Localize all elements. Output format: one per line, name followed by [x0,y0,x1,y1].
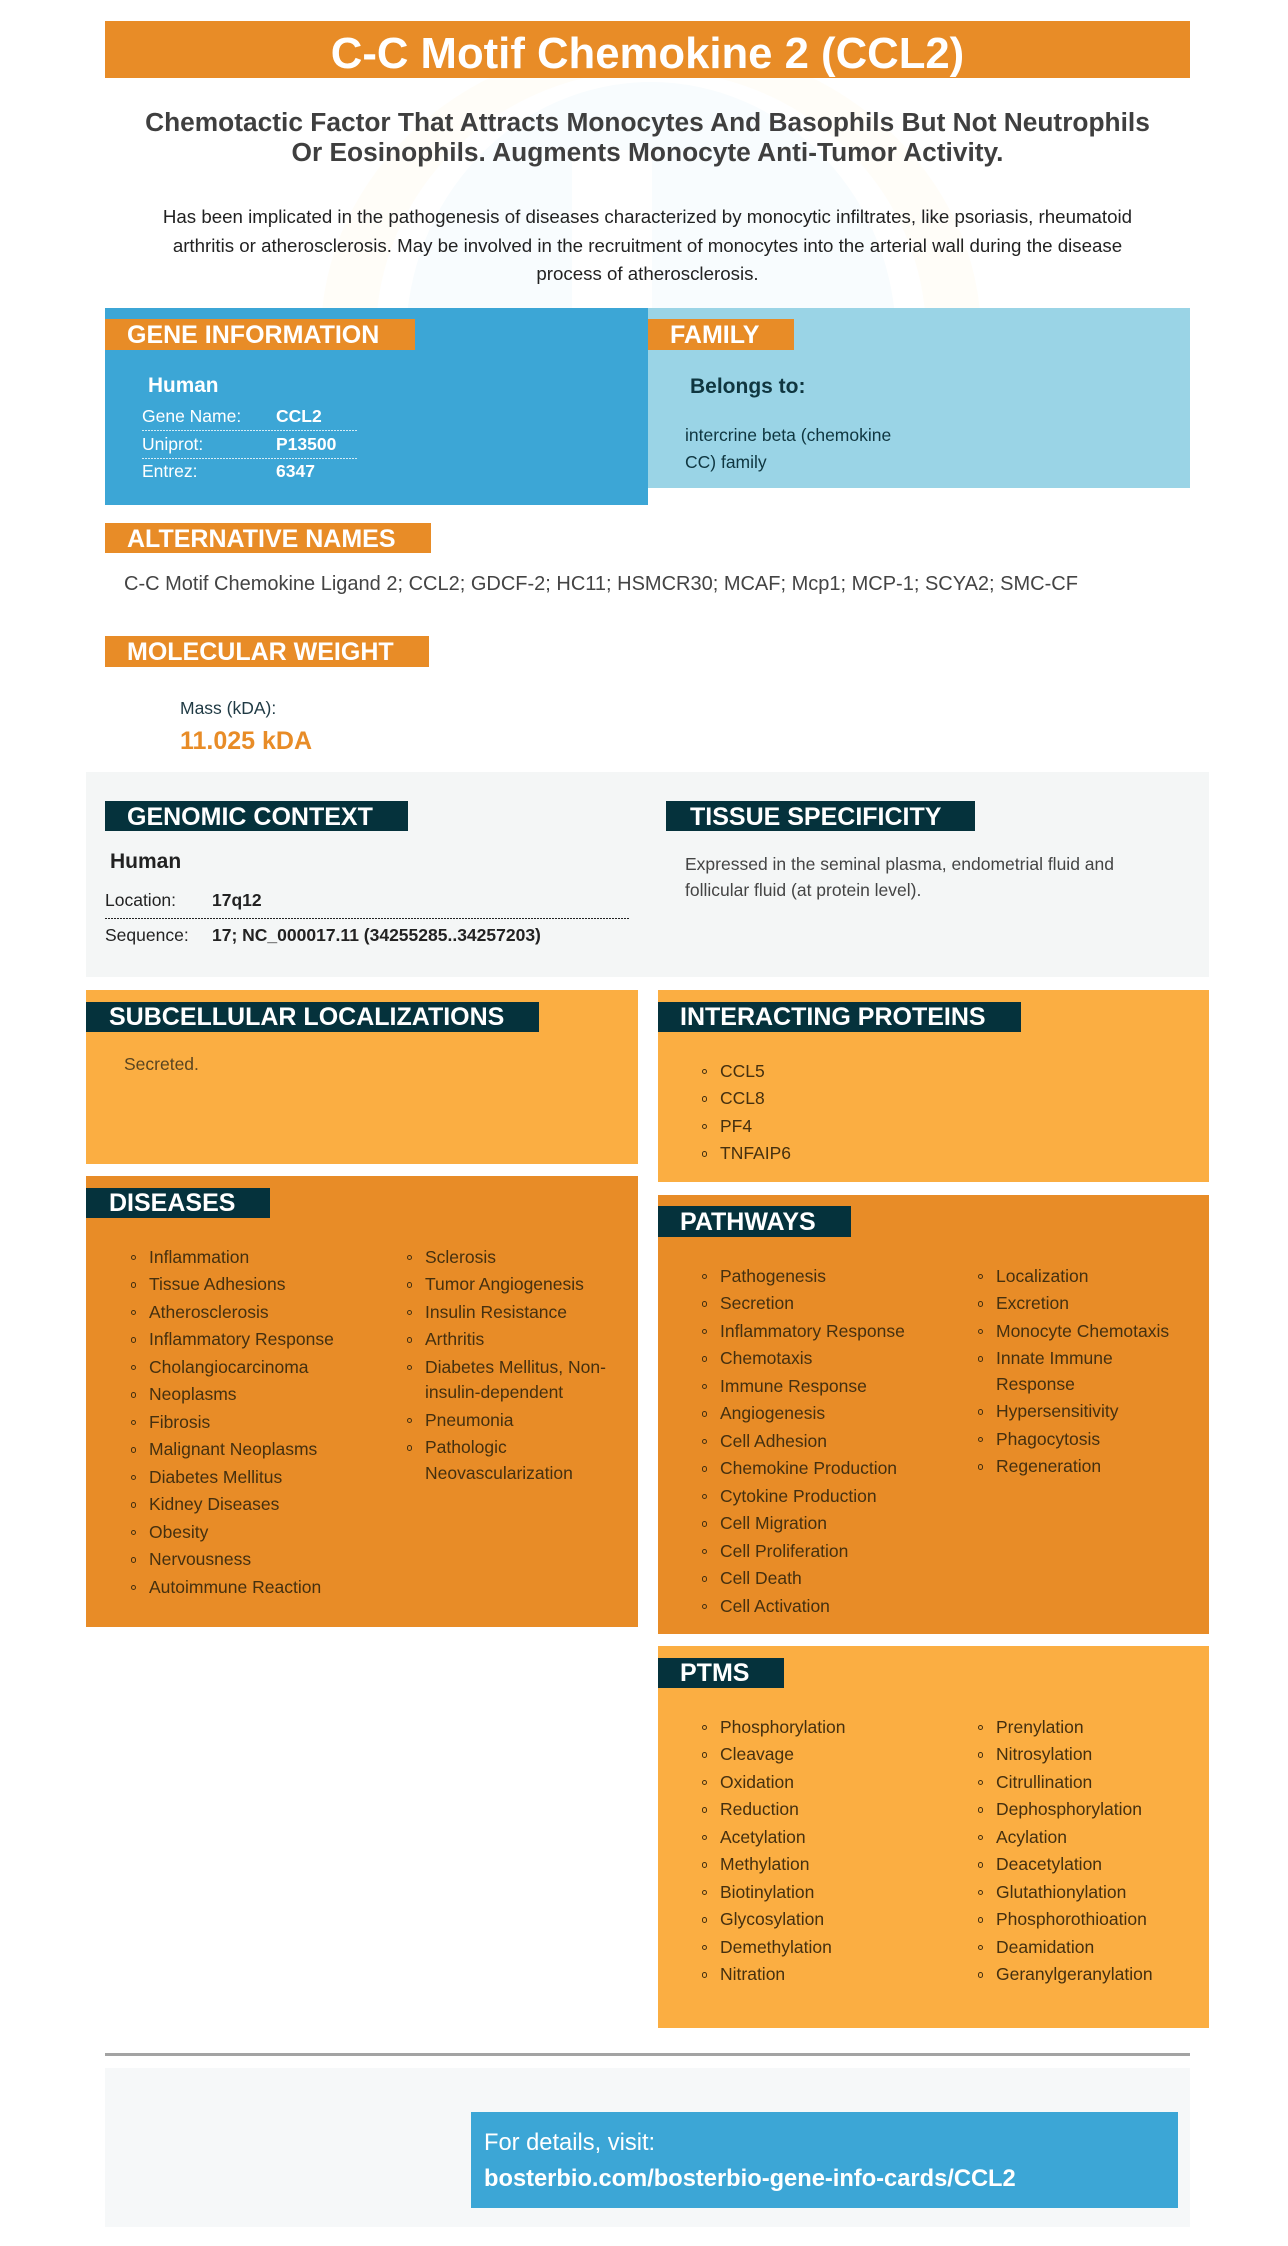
heading: DISEASES [109,1189,235,1217]
list column 2: Deamidation [996,1937,1094,1957]
list: PF4 [720,1116,752,1136]
list: TNFAIP6 [720,1143,791,1163]
tissue text: Expressed in the seminal plasma, endometrial fluid and [685,854,1114,874]
description: process of atherosclerosis. [536,263,759,284]
list column 1: Diabetes Mellitus [149,1467,282,1487]
sequence row: Sequence: [105,925,189,945]
list column 1: Atherosclerosis [149,1302,269,1322]
sequence row: 17; NC_000017.11 (34255285..34257203) [212,925,541,945]
panel: subcellular localizations [86,990,638,1164]
list column 2: Phosphorothioation [996,1909,1147,1929]
mass label: Mass (kDA): [180,698,276,718]
list column 1: Cytokine Production [720,1486,877,1506]
list column 1: Cell Activation [720,1596,830,1616]
species: Human [148,374,218,397]
heading: family: FAMILY [670,321,759,349]
panel: diseases [86,1176,638,1627]
list column 2: Citrullination [996,1772,1092,1792]
list column 1: Reduction [720,1799,799,1819]
list column 1: Neoplasms [149,1384,237,1404]
title: C-C Motif Chemokine 2 (CCL2) [331,29,964,78]
visit label: For details, visit: [484,2130,655,2156]
list column 1: Nervousness [149,1549,251,1569]
list column 1 [131,1247,334,1597]
list column 2: Localization [996,1266,1088,1286]
list column 1: Oxidation [720,1772,794,1792]
heading [658,1206,851,1237]
title [105,21,1190,78]
gene info table: Uniprot: [142,434,203,454]
panel: ptms [658,1646,1209,2028]
list column 1: Secretion [720,1293,794,1313]
subtitle: Chemotactic Factor That Attracts Monocytes And Basophils But Not Neutrophils [145,107,1150,137]
mass value: 11.025 kDA [180,727,312,755]
list column 1: Glycosylation [720,1909,824,1929]
list column 1: Demethylation [720,1937,832,1957]
list column 1: Fibrosis [149,1412,210,1432]
list column 2: Diabetes Mellitus, Non- [425,1357,606,1377]
list column 1: Cell Adhesion [720,1431,827,1451]
description: arthritis or atherosclerosis. May be involved in the recruitment of monocytes into the arterial wall during the disease [173,235,1122,256]
url: bosterbio.com/bosterbio-gene-info-cards/CCL2 [484,2166,1016,2192]
list column 2: Prenylation [996,1717,1084,1737]
panel: pathways [658,1195,1209,1634]
list column 2: Pathologic [425,1437,507,1457]
list column 2: Innate Immune [996,1348,1113,1368]
description: Has been implicated in the pathogenesis of diseases characterized by monocytic infiltrates, like psoriasis, rheumatoid [163,206,1132,227]
list column 2 [978,1266,1169,1476]
list column 2: Neovascularization [425,1463,573,1483]
heading: INTERACTING PROTEINS [680,1003,986,1031]
heading: family [648,319,794,350]
heading: alternative names: ALTERNATIVE NAMES [127,525,396,553]
list column 1: Cleavage [720,1744,794,1764]
list column 2: Nitrosylation [996,1744,1092,1764]
watermark logo [0,0,1288,308]
gene info table: P13500 [276,434,336,454]
list column 1: Inflammatory Response [149,1329,334,1349]
list column 1: Autoimmune Reaction [149,1577,321,1597]
list column 1: Cell Death [720,1568,802,1588]
list column 1: Inflammation [149,1247,249,1267]
list column 2: Dephosphorylation [996,1799,1142,1819]
heading: PTMS [680,1659,749,1687]
list column 1 [702,1717,846,1984]
list column 1: Kidney Diseases [149,1494,279,1514]
panel: interacting proteins [658,990,1209,1182]
list column 1: Angiogenesis [720,1403,825,1423]
location row: Location: [105,890,176,910]
list column 2: Geranylgeranylation [996,1964,1153,1984]
belongs to: Belongs to: [690,375,806,398]
list column 1: Chemotaxis [720,1348,812,1368]
list column 2: Response [996,1374,1075,1394]
list column 1: Nitration [720,1964,785,1984]
location row [105,890,262,910]
list column 1: Malignant Neoplasms [149,1439,317,1459]
list column 2: Insulin Resistance [425,1302,567,1322]
list column 2 [978,1717,1153,1984]
list column 1: Immune Response [720,1376,867,1396]
list column 2: Deacetylation [996,1854,1102,1874]
panel: family [648,308,1190,488]
list column 2: Excretion [996,1293,1069,1313]
list column 1: Phosphorylation [720,1717,846,1737]
list column 2: Phagocytosis [996,1429,1100,1449]
list column 1: Tissue Adhesions [149,1274,286,1294]
list column 2: Tumor Angiogenesis [425,1274,584,1294]
list: CCL5 [720,1061,765,1081]
list [702,1061,791,1163]
list column 2: Glutathionylation [996,1882,1126,1902]
text: Secreted. [124,1054,199,1074]
heading [86,1188,270,1218]
list column 2: Pneumonia [425,1410,514,1430]
family text [685,425,891,472]
gene info table: 6347 [276,461,315,481]
location row: 17q12 [212,890,262,910]
list column 2: insulin-dependent [425,1382,563,1402]
gene info table: CCL2 [276,406,322,426]
list column 1: Cell Proliferation [720,1541,848,1561]
family text: intercrine beta (chemokine [685,425,891,445]
subtitle: Or Eosinophils. Augments Monocyte Anti-Tumor Activity. [292,136,1004,166]
gene info table: Entrez: [142,461,197,481]
list column 2: Regeneration [996,1456,1101,1476]
species: Human [110,850,181,873]
list column 2: Acylation [996,1827,1067,1847]
list column 1: Chemokine Production [720,1458,897,1478]
description [163,206,1132,284]
callout: details link [471,2112,1178,2208]
list column 1: Cell Migration [720,1513,827,1533]
heading [658,1658,784,1688]
gene info table: Gene Name: [142,406,241,426]
list column 2 [407,1247,606,1483]
heading: SUBCELLULAR LOCALIZATIONS [109,1003,504,1031]
list column 1: Inflammatory Response [720,1321,905,1341]
heading: genomic context: GENOMIC CONTEXT [127,803,373,831]
gene info table [142,406,357,481]
panel: gene information [105,308,648,505]
tissue text [685,854,1114,900]
list column 2: Monocyte Chemotaxis [996,1321,1169,1341]
list column 2: Sclerosis [425,1247,496,1267]
list column 1 [702,1266,905,1616]
list column 1: Acetylation [720,1827,806,1847]
heading: gene information: GENE INFORMATION [127,321,379,349]
alternative names text: C-C Motif Chemokine Ligand 2; CCL2; GDCF-2; HC11; HSMCR30; MCAF; Mcp1; MCP-1; SCYA2; SMC-CF [124,573,1078,595]
heading: molecular weight: MOLECULAR WEIGHT [127,638,394,666]
list column 1: Methylation [720,1854,810,1874]
list column 1: Pathogenesis [720,1266,826,1286]
heading: tissue specificity: TISSUE SPECIFICITY [690,803,941,831]
list column 1: Cholangiocarcinoma [149,1357,309,1377]
list column 1: Biotinylation [720,1882,814,1902]
family text: CC) family [685,452,767,472]
tissue text: follicular fluid (at protein level). [685,880,921,900]
list column 2: Arthritis [425,1329,484,1349]
panel: footer [105,2068,1190,2227]
list: CCL8 [720,1088,765,1108]
heading: PATHWAYS [680,1208,816,1236]
panel: genomic context and tissue specificity [86,772,1209,977]
list column 2: Hypersensitivity [996,1401,1119,1421]
list column 1: Obesity [149,1522,208,1542]
subtitle [145,107,1150,166]
